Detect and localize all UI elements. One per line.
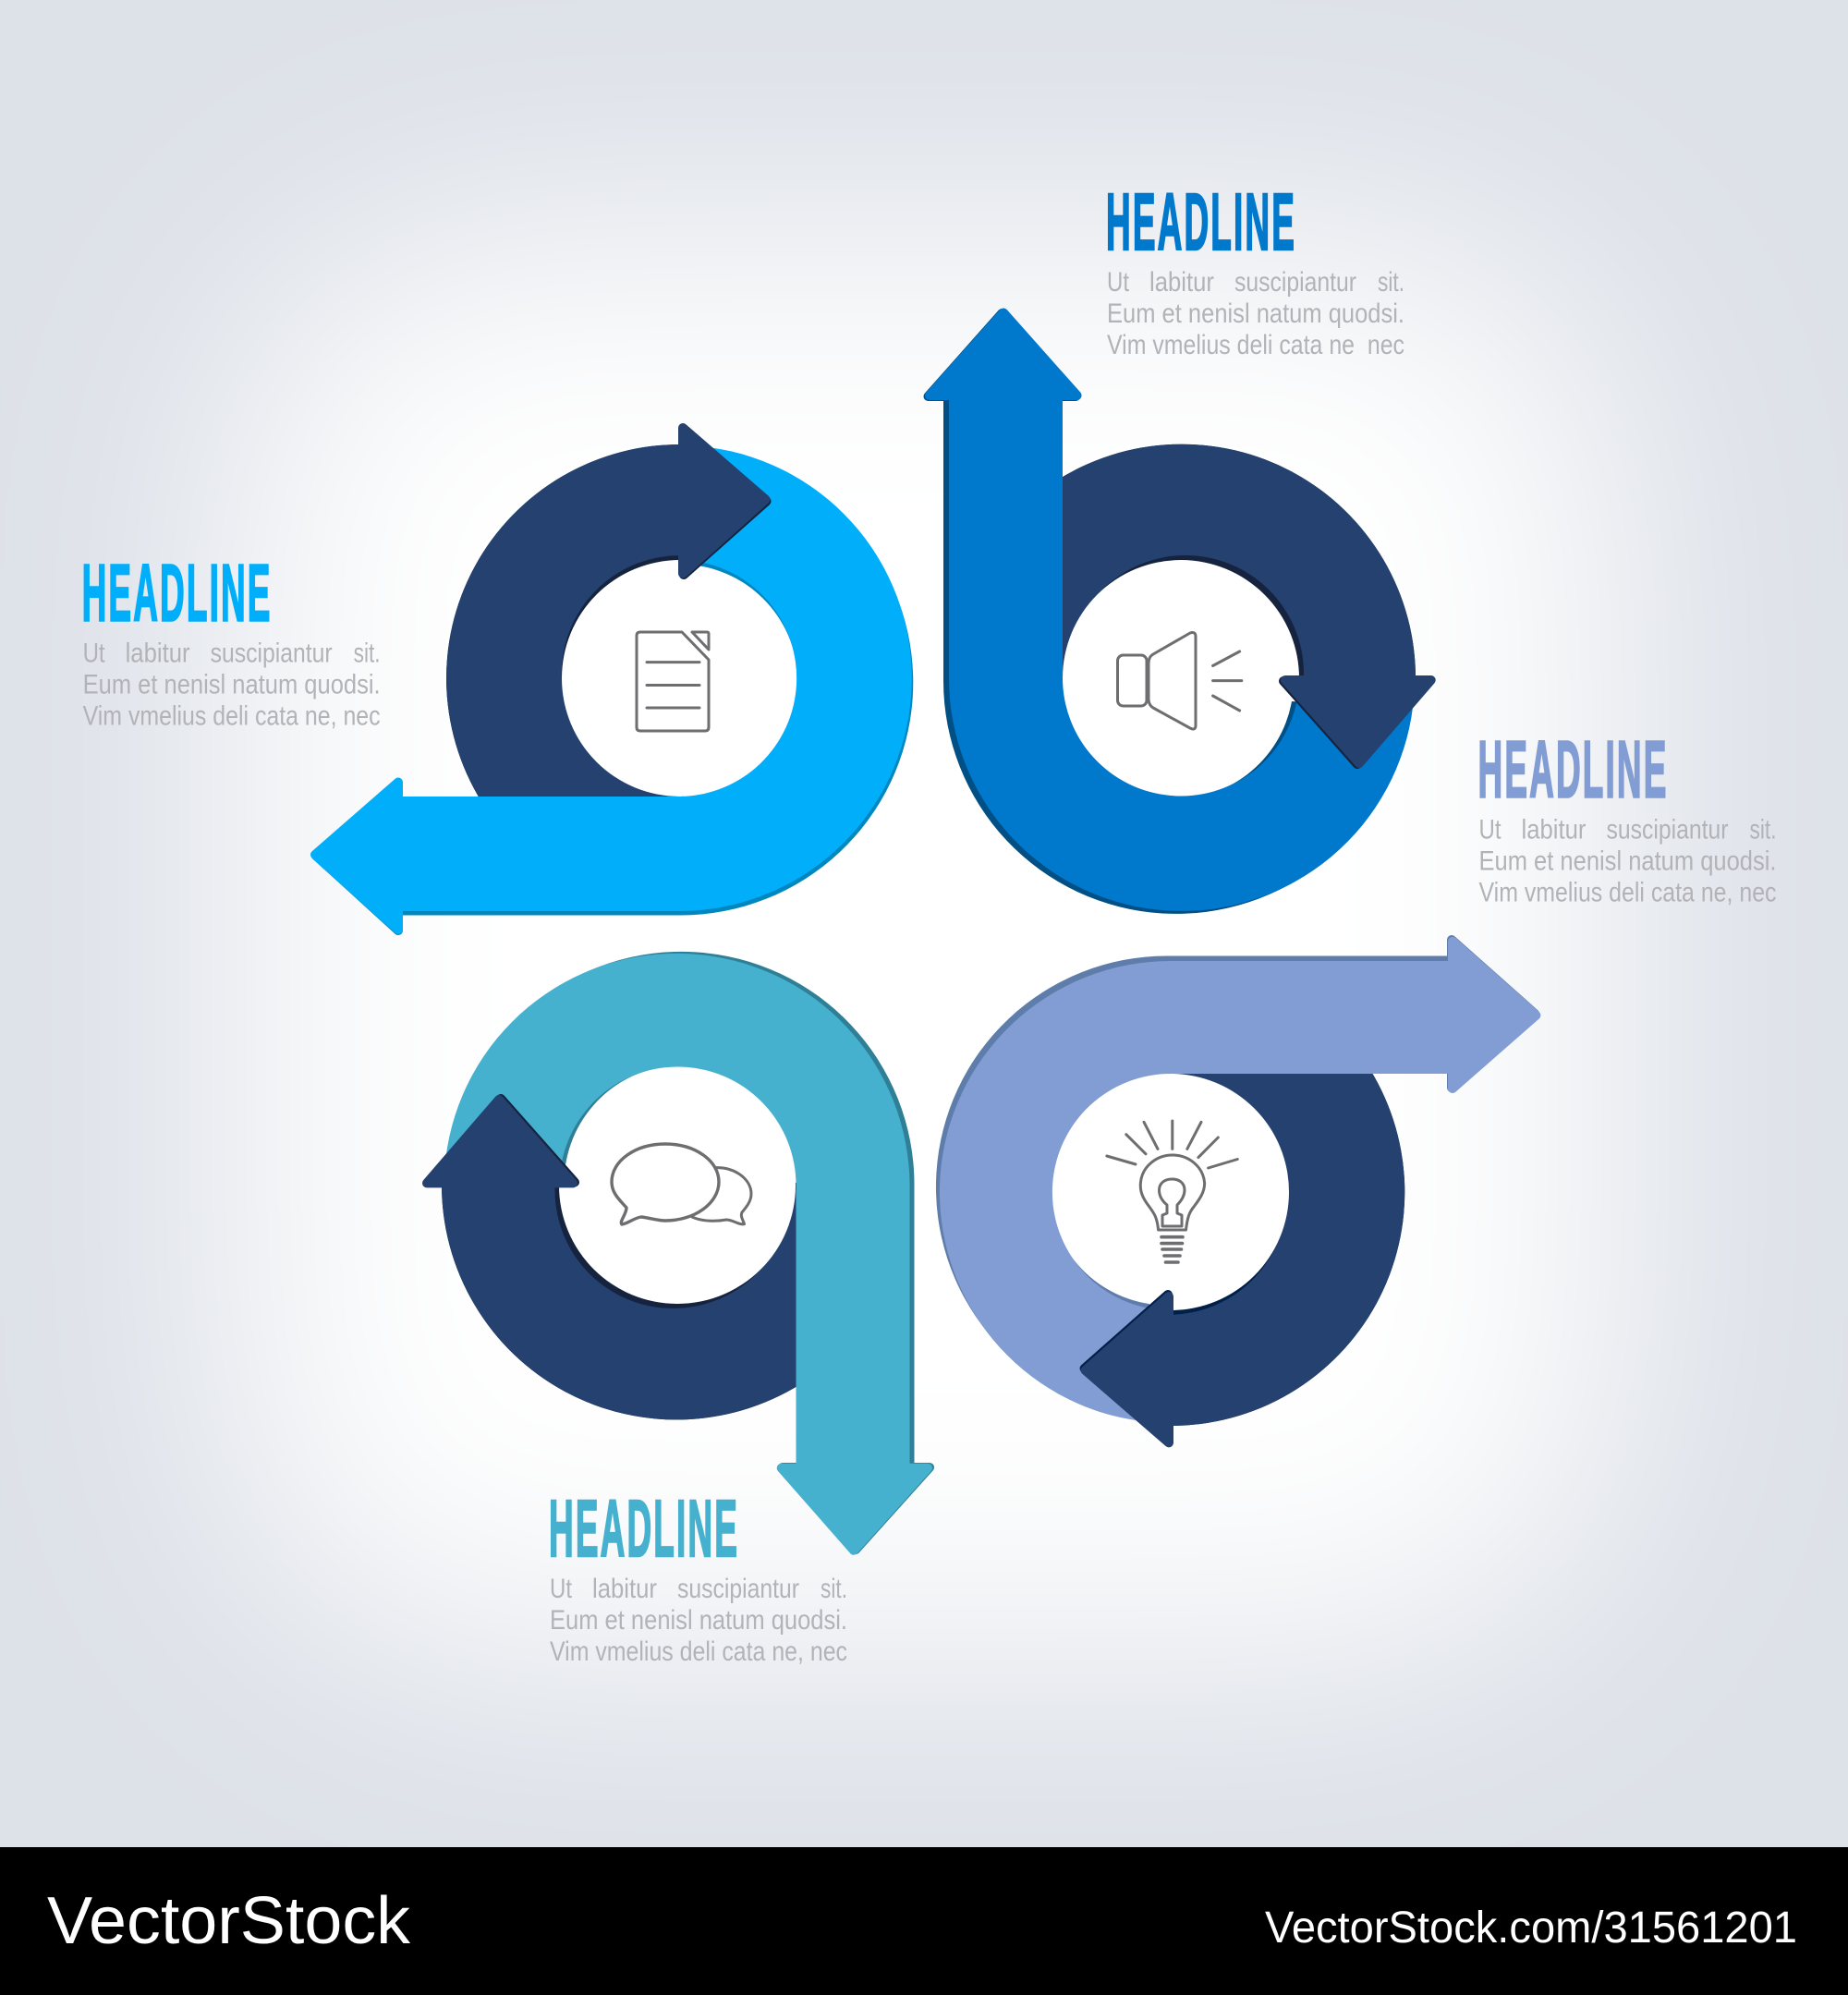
footer url: VectorStock.com/31561201 xyxy=(1265,1904,1797,1952)
text block: top right: Eum et nenisl natum quodsi. xyxy=(1107,298,1404,329)
text block: left: labitur xyxy=(126,639,190,669)
light blue arrow xyxy=(315,447,913,931)
text block: bottom: labitur xyxy=(592,1574,657,1604)
text block: left xyxy=(83,639,381,732)
icon: light bulb xyxy=(1107,1121,1237,1262)
footer logo: VectorStock xyxy=(47,1884,411,1958)
text block: bottom: Vim vmelius deli cata ne, nec xyxy=(550,1636,847,1667)
dark arrow head xyxy=(1283,680,1431,764)
text block: bottom: sit. xyxy=(821,1574,847,1604)
text block: top right xyxy=(1107,267,1404,360)
text block: left: Ut xyxy=(83,639,105,669)
text: HEADLINE xyxy=(82,549,273,639)
text block: top right: suscipiantur xyxy=(1234,267,1356,298)
dark arrow head xyxy=(1085,1295,1169,1442)
text block: left: suscipiantur xyxy=(211,639,333,669)
panel: periwinkle arrow unit (bottom right) xyxy=(936,940,1536,1442)
text block: right xyxy=(1478,815,1776,907)
text block: left: sit. xyxy=(354,639,381,669)
text: HEADLINE xyxy=(1106,177,1296,267)
text block: right: Vim vmelius deli cata ne, nec xyxy=(1478,878,1776,907)
text block: bottom: Eum et nenisl natum quodsi. xyxy=(550,1605,847,1636)
icon: document xyxy=(637,632,709,731)
teal arrow xyxy=(445,952,930,1551)
dark arrow head xyxy=(427,1099,575,1183)
text block: bottom: Ut xyxy=(550,1574,573,1604)
dark ring arc xyxy=(442,1067,808,1419)
text block: right: sit. xyxy=(1750,815,1776,845)
dark ring arc xyxy=(1052,1063,1404,1426)
text block: bottom xyxy=(550,1574,847,1667)
panel: blue arrow unit (top right) xyxy=(928,312,1431,914)
text block: top right: Vim vmelius deli cata ne nec xyxy=(1107,330,1404,360)
text block: right: Ut xyxy=(1478,815,1502,845)
text block: right: Eum et nenisl natum quodsi. xyxy=(1478,846,1776,876)
text block: left: Vim vmelius deli cata ne, nec xyxy=(83,701,381,732)
text block: left: Eum et nenisl natum quodsi. xyxy=(83,670,381,700)
dark ring arc xyxy=(1053,444,1416,797)
periwinkle arrow xyxy=(936,940,1536,1421)
text block: right: labitur xyxy=(1521,815,1586,845)
text block: right: suscipiantur xyxy=(1606,815,1729,845)
dark ring arc xyxy=(446,444,798,809)
blue arrow xyxy=(928,312,1413,914)
text block: top right: labitur xyxy=(1149,267,1214,298)
dark arrow head xyxy=(683,428,767,575)
text: HEADLINE xyxy=(549,1484,739,1574)
text block: top right: Ut xyxy=(1107,267,1130,298)
panel: teal arrow unit (bottom left) xyxy=(427,952,930,1551)
text block: bottom: suscipiantur xyxy=(677,1574,799,1604)
panel: light blue arrow unit (top left) xyxy=(315,428,913,931)
icon: speaker xyxy=(1118,632,1242,729)
footer bar xyxy=(0,1847,1848,1995)
icon: speech bubbles xyxy=(612,1144,751,1224)
text block: top right: sit. xyxy=(1378,267,1404,298)
